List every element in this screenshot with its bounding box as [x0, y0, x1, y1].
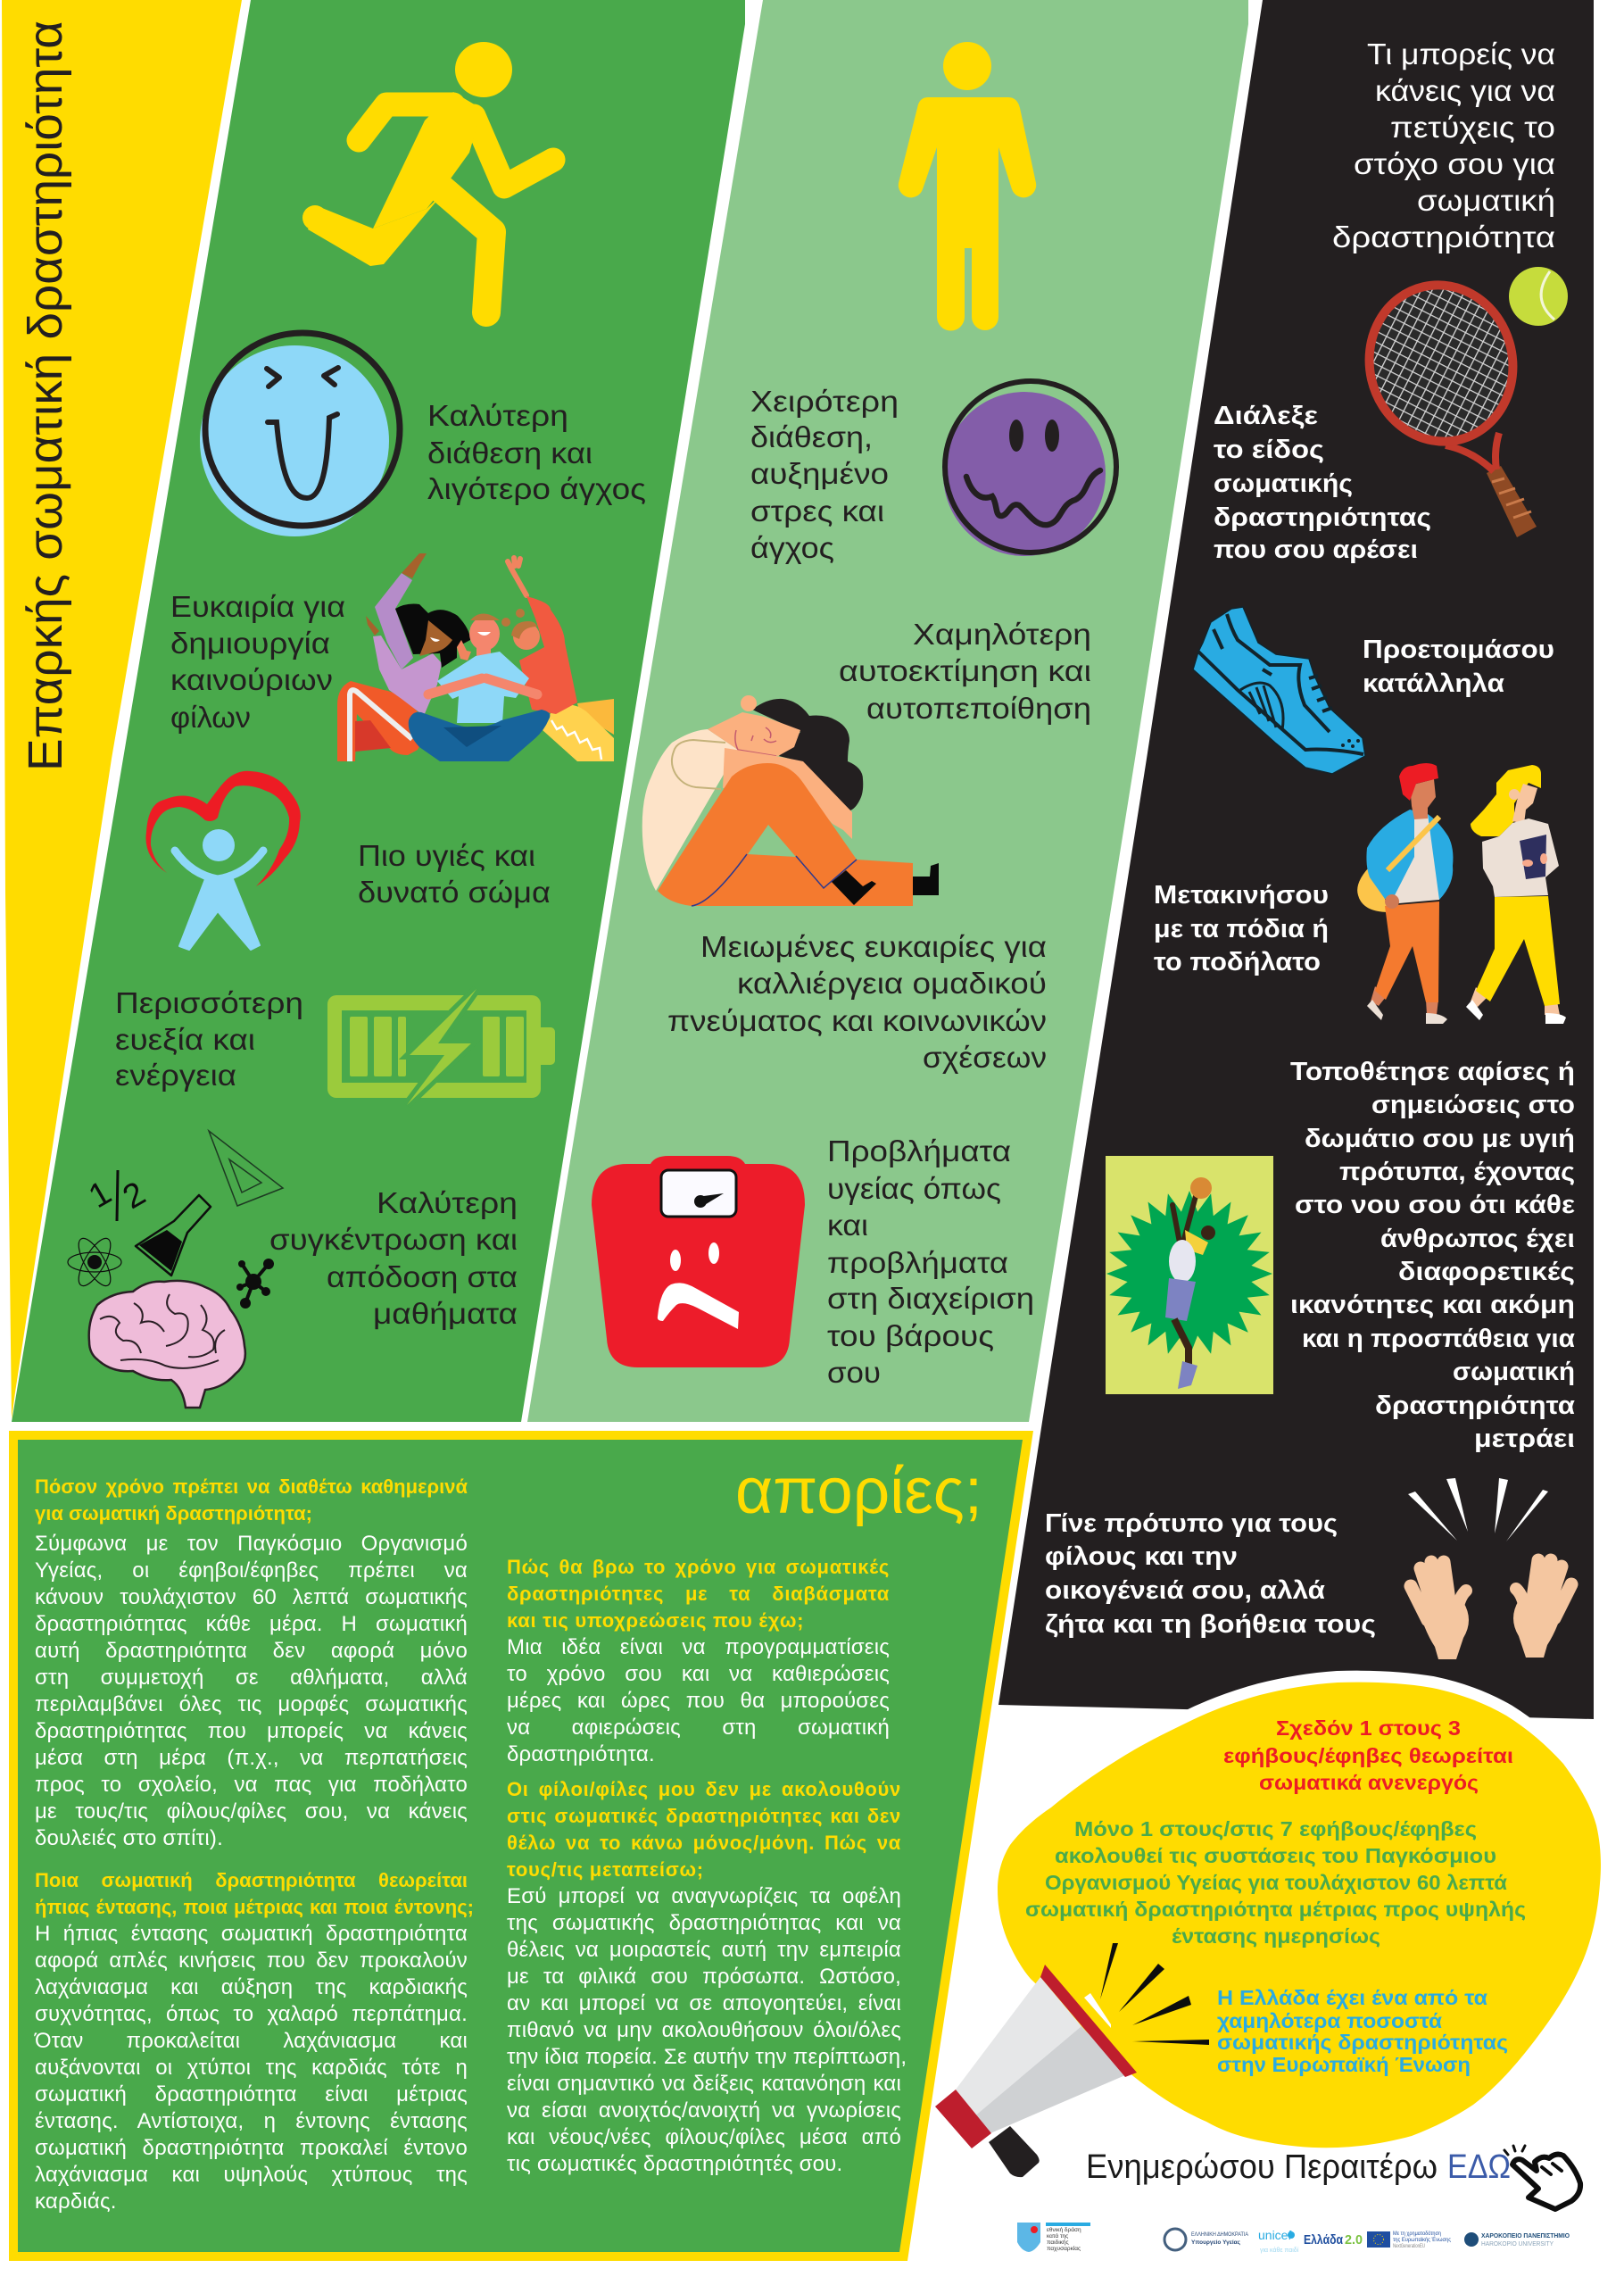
- logo: Greece 2.0: 2.0: [1345, 2232, 1363, 2248]
- text: low self esteem: αυτοεκτίμηση και: [839, 654, 1091, 687]
- icon: running figure: [302, 42, 553, 312]
- text: posters and notes: και η προσπάθεια για: [1302, 1325, 1575, 1353]
- text: posters and notes: διαφορετικές: [1398, 1258, 1575, 1286]
- text block: friends do not follow: με τα φιλικά σου πρόσωπα. Ωστόσο,: [507, 1965, 901, 1989]
- text: prepare: [1363, 636, 1554, 698]
- text: new friends: [170, 590, 345, 734]
- heading: what you can do: στόχο σου για: [1354, 147, 1555, 180]
- text: better mood: λιγότερο άγχος: [427, 472, 646, 505]
- text block: friends do not follow: θέλω να το κάνω μόνος/μόνη. Πώς να: [507, 1832, 901, 1854]
- logo: Harokopio University: HAROKOPIO UNIVERSITY: [1481, 2241, 1554, 2248]
- illustration: two students walking: [1357, 763, 1566, 1024]
- text block: friends do not follow: Εσύ μπορεί να αναγνωρίζεις τα οφέλη: [507, 1884, 901, 1908]
- text block: intensity levels: ήπιας έντασης, ποια μέτριας και ποια έντονης;: [35, 1896, 474, 1918]
- text: be a role model: φίλους και την: [1045, 1542, 1238, 1571]
- text: low self esteem: αυτοπεποίθηση: [866, 692, 1091, 725]
- text block: daily time needed: μέσα στη μέρα (π.χ., να περπατήσεις: [35, 1746, 468, 1770]
- text: be a role model: Γίνε πρότυπο για τους: [1045, 1509, 1338, 1538]
- text block: intensity levels: λαχάνιασμα και υψηλούς χτύπους της: [35, 2163, 468, 2187]
- logo: Hellenic Republic ministry: ΕΛΛΗΝΙΚΗ ΔΗΜΟΚΡΑΤΙΑ: [1191, 2231, 1249, 2238]
- text: prepare: Προετοιμάσου: [1363, 636, 1554, 664]
- text: worse mood: αυξημένο: [750, 457, 889, 490]
- logo: national action shield: εθνική δράση: [1047, 2226, 1081, 2233]
- logo: national action shield: παχυσαρκίας: [1047, 2245, 1081, 2252]
- link text: learn more here: ΕΔΩ: [1447, 2148, 1511, 2186]
- text block: daily time needed: δραστηριότητας κάθε μέρα. Η σωματική: [35, 1612, 468, 1636]
- text: be a role model: [1045, 1509, 1376, 1639]
- icon: happy face: [200, 333, 400, 536]
- text block: intensity levels: έντασης. Αντίστοιχα, η έντονης έντασης: [35, 2109, 468, 2133]
- stat: one in three inactive: σωματικά ανενεργός: [1259, 1771, 1479, 1794]
- text block: friends do not follow: [507, 1778, 907, 2176]
- text block: finding time: δραστηριότητες με τα διαβάσματα: [507, 1583, 890, 1605]
- icon: blue running shoe: [1193, 607, 1365, 774]
- heading: questions: απορίες;: [735, 1456, 982, 1527]
- text: be a role model: οικογένειά σου, αλλά: [1045, 1576, 1325, 1605]
- callout: yellow speech bubble: [998, 1683, 1601, 2148]
- text: fewer team opportunities: πνεύματος και κοινωνικών: [667, 1004, 1047, 1037]
- icon: pointing hand cursor: [1504, 2146, 1580, 2209]
- text: posters and notes: πρότυπα, έχοντας: [1339, 1158, 1575, 1186]
- text: posters and notes: [1290, 1058, 1575, 1453]
- text block: daily time needed: κάνουν τουλάχιστον 60 λεπτά σωματικής: [35, 1585, 468, 1609]
- logo: Hellenic Republic ministry: Υπουργείο Υγείας: [1191, 2239, 1241, 2246]
- text: more wellbeing: Περισσότερη: [115, 986, 303, 1019]
- illustration: sad seated girl: [642, 695, 939, 906]
- text: more wellbeing: ενέργεια: [115, 1059, 236, 1092]
- logo: unicef: unicef: [1258, 2228, 1291, 2242]
- text: new friends: δημιουργία: [170, 627, 330, 660]
- illustration: school symbols and brain: [68, 1131, 283, 1408]
- text block: friends do not follow: την ίδια πορεία. Σε αυτήν την περίπτωση,: [507, 2045, 907, 2069]
- logo: Harokopio University: [1464, 2232, 1570, 2248]
- icon: standing figure: [899, 42, 1036, 330]
- text block: friends do not follow: πιθανό να μην ακολουθήσουν όλοι/όλες: [507, 2018, 901, 2042]
- text block: friends do not follow: και νέους/νέες φίλους/φίλες μέσα από: [507, 2125, 901, 2149]
- text: worse mood: [750, 385, 899, 564]
- text: health problems: υγείας όπως: [827, 1172, 1001, 1205]
- icon: clapping hands: [1408, 1478, 1571, 1659]
- text: new friends: καινούριων: [170, 663, 333, 696]
- panel: yellow title strip: [2, 0, 242, 1419]
- text block: daily time needed: στη συμμετοχή σε αθλήματα, αλλά: [35, 1666, 468, 1690]
- text: more wellbeing: ευεξία και: [115, 1023, 255, 1056]
- text: fewer team opportunities: σχέσεων: [923, 1041, 1047, 1074]
- text: health problems: Προβλήματα: [827, 1134, 1011, 1167]
- logo: unicef: για κάθε παιδί: [1260, 2247, 1299, 2254]
- text: fewer team opportunities: [667, 930, 1047, 1074]
- vertical title: Επαρκής σωματική δραστηριότητα: [19, 21, 72, 771]
- illustration: school symbols and brain: 1: [83, 1174, 118, 1216]
- stat: one in three inactive: Σχεδόν 1 στους 3: [1276, 1716, 1461, 1740]
- text block: intensity levels: λαχάνιασμα και αύξηση της καρδιακής: [35, 1975, 468, 1999]
- text block: intensity levels: Η ήπιας έντασης σωματική δραστηριότητα: [35, 1922, 468, 1946]
- logo: national action shield: παιδικής: [1047, 2239, 1069, 2246]
- logo: unicef: [1258, 2228, 1299, 2254]
- text block: daily time needed: Σύμφωνα με τον Παγκόσμιο Οργανισμό: [35, 1532, 468, 1556]
- icon: sad red scale: [592, 1156, 805, 1367]
- stat: Greece low rates: σωματικής δραστηριότητας: [1217, 2031, 1508, 2054]
- text: more wellbeing: [115, 986, 303, 1092]
- text block: daily time needed: Υγείας, οι έφηβοι/έφηβες πρέπει να: [35, 1558, 468, 1583]
- logo: Greece 2.0: Ελλάδα: [1304, 2232, 1344, 2248]
- text: posters and notes: Τοποθέτησε αφίσες ή: [1290, 1058, 1575, 1086]
- text: worse mood: στρες και: [750, 494, 884, 528]
- text block: friends do not follow: τις σωματικές δραστηριότητές σου.: [507, 2152, 842, 2176]
- text: walk or cycle: [1154, 881, 1329, 976]
- text block: intensity levels: [34, 1869, 474, 2214]
- stat: Greece low rates: στην Ευρωπαϊκή Ένωση: [1217, 2053, 1471, 2076]
- text: healthier body: δυνατό σώμα: [358, 876, 551, 909]
- stat: Greece low rates: χαμηλότερα ποσοστά: [1217, 2009, 1442, 2032]
- logo: EU funding: Με τη χρηματοδότηση: [1393, 2231, 1441, 2237]
- text block: friends do not follow: να είσαι ανοιχτός/ανοιχτή να γνωρίσεις: [507, 2098, 901, 2123]
- icon: wobbly purple face: [943, 381, 1116, 556]
- text block: intensity levels: συχνότητας, όπως το χαλαρό περπάτημα.: [35, 2002, 468, 2026]
- text block: daily time needed: δραστηριότητας που μπορείς να κάνεις: [35, 1719, 468, 1743]
- text: worse mood: διάθεση,: [750, 420, 873, 453]
- text: health problems: σου: [827, 1356, 881, 1389]
- stat: one in seven follows recommendations: σωματική δραστηριότητα μέτριας προς υψηλής: [1025, 1898, 1526, 1921]
- text: fewer team opportunities: Μειωμένες ευκαιρίες για: [700, 930, 1047, 963]
- text block: daily time needed: αυτή δραστηριότητα δεν αφορά μόνο: [35, 1639, 468, 1663]
- text block: intensity levels: αφορά απλές κινήσεις που δεν προκαλούν: [35, 1948, 468, 1973]
- text: worse mood: άγχος: [750, 531, 834, 564]
- panel: consequences light green: [527, 0, 1248, 1422]
- text block: finding time: δραστηριότητα.: [507, 1742, 655, 1766]
- text block: friends do not follow: Οι φίλοι/φίλες μου δεν με ακολουθούν: [507, 1778, 901, 1800]
- text: choose the activity: το είδος: [1214, 436, 1324, 464]
- text block: finding time: να αφιερώσεις στη σωματική: [507, 1716, 890, 1740]
- text: choose the activity: [1214, 402, 1431, 564]
- text: better mood: [427, 399, 646, 505]
- illustration: school symbols and brain: 2: [117, 1175, 152, 1217]
- text: better concentration: συγκέντρωση και: [269, 1223, 518, 1256]
- panel: what you can do black: [998, 0, 1594, 1719]
- text: posters and notes: άνθρωπος έχει: [1380, 1225, 1575, 1253]
- text block: daily time needed: για σωματική δραστηριότητα;: [35, 1502, 312, 1525]
- logo: Hellenic Republic ministry: [1164, 2229, 1249, 2250]
- illustration: group of friends: [337, 553, 614, 761]
- text: posters and notes: δραστηριότητα: [1375, 1392, 1575, 1420]
- text block: finding time: και τις υποχρεώσεις που έχω;: [507, 1609, 804, 1632]
- text block: finding time: το χρόνο σου και να καθιερώσεις: [507, 1662, 890, 1686]
- logo: national action shield: κατά της: [1047, 2232, 1068, 2239]
- text block: friends do not follow: αν και μπορεί να σε απογοητεύει, είναι: [507, 1991, 901, 2015]
- heading: what you can do: σωματική: [1417, 184, 1555, 217]
- text block: intensity levels: σωματική δραστηριότητα προκαλεί έντονο: [35, 2136, 468, 2160]
- text: walk or cycle: Μετακινήσου: [1154, 881, 1329, 910]
- stat: one in three inactive: [1223, 1716, 1513, 1794]
- text: prepare: κατάλληλα: [1363, 669, 1504, 698]
- text: better concentration: μαθήματα: [373, 1297, 518, 1330]
- icon: charging battery: [327, 989, 555, 1105]
- text: worse mood: Χειρότερη: [750, 385, 899, 418]
- text block: finding time: [507, 1556, 890, 1766]
- stat: one in seven follows recommendations: Μόνο 1 στους/στις 7 εφήβους/έφηβες: [1074, 1817, 1477, 1840]
- text: better concentration: Καλύτερη: [377, 1186, 518, 1219]
- text block: friends do not follow: τους/τις μεταπείσω;: [507, 1858, 704, 1881]
- text: better concentration: [269, 1186, 518, 1330]
- text block: daily time needed: προς το σχολείο, να πας για ποδήλατο: [35, 1773, 468, 1797]
- text block: intensity levels: αυξάνονται οι χτύποι της καρδιάς τότε η: [35, 2056, 468, 2080]
- text: better mood: Καλύτερη: [427, 399, 568, 432]
- text block: daily time needed: Πόσον χρόνο πρέπει να διαθέτω καθημερινά: [35, 1475, 468, 1498]
- text block: intensity levels: Όταν προκαλείται λαχάνιασμα και: [35, 2029, 468, 2053]
- text: posters and notes: σημειώσεις στο: [1371, 1091, 1575, 1119]
- text block: finding time: Μια ιδέα είναι να προγραμματίσεις: [507, 1635, 890, 1659]
- illustration: basketball poster: [1106, 1156, 1273, 1394]
- logo: EU funding: NextGenerationEU: [1393, 2244, 1425, 2249]
- panel: questions frame: [9, 1431, 1033, 2261]
- text block: finding time: Πώς θα βρω το χρόνο για σωματικές: [507, 1556, 890, 1578]
- logo: Harokopio University: ΧΑΡΟΚΟΠΕΙΟ ΠΑΝΕΠΙΣΤΗΜΙΟ: [1481, 2233, 1570, 2239]
- text: choose the activity: που σου αρέσει: [1214, 536, 1418, 564]
- text block: daily time needed: [35, 1475, 468, 1850]
- text block: daily time needed: δουλειές στο σπίτι).: [35, 1826, 223, 1850]
- text: better mood: διάθεση και: [427, 436, 592, 469]
- text: choose the activity: δραστηριότητας: [1214, 503, 1431, 532]
- text: posters and notes: στο νου σου ότι κάθε: [1295, 1191, 1575, 1219]
- text: posters and notes: σωματική: [1453, 1358, 1575, 1386]
- text: be a role model: ζήτα και τη βοήθεια τους: [1045, 1610, 1376, 1639]
- text block: daily time needed: περιλαμβάνει όλες τις μορφές σωματικής: [35, 1692, 468, 1716]
- text: health problems: και: [827, 1209, 868, 1242]
- heading: what you can do: δραστηριότητα: [1332, 220, 1555, 253]
- stat: Greece low rates: Η Ελλάδα έχει ένα από τα: [1217, 1986, 1487, 2009]
- text: health problems: [827, 1134, 1034, 1389]
- heading: what you can do: πετύχεις το: [1390, 111, 1555, 144]
- text: fewer team opportunities: καλλιέργεια ομαδικού: [737, 967, 1047, 1000]
- text: low self esteem: Χαμηλότερη: [913, 618, 1091, 651]
- text: healthier body: Πιο υγιές και: [358, 839, 535, 872]
- text block: friends do not follow: είναι σημαντικό να δείξεις κατανόηση και: [507, 2072, 901, 2096]
- text block: daily time needed: με τους/τις φίλους/φίλες σου, να κάνεις: [35, 1799, 468, 1824]
- text block: finding time: μέρες και ώρες που θα μπορούσες: [507, 1689, 890, 1713]
- stat: one in seven follows recommendations: έντασης ημερησίως: [1172, 1924, 1380, 1948]
- text: new friends: Ευκαιρία για: [170, 590, 345, 623]
- text block: intensity levels: σωματική δραστηριότητα είναι μέτριας: [35, 2082, 468, 2106]
- text block: friends do not follow: στις σωματικές δραστηριότητες και δεν: [507, 1805, 901, 1827]
- text: choose the activity: Διάλεξε: [1214, 402, 1318, 430]
- text: choose the activity: σωματικής: [1214, 469, 1353, 498]
- text block: intensity levels: καρδιάς.: [35, 2189, 117, 2214]
- text block: intensity levels: Ποια σωματική δραστηριότητα θεωρείται: [35, 1869, 468, 1891]
- text: posters and notes: μετράει: [1474, 1425, 1575, 1453]
- logo: EU funding: της Ευρωπαϊκής Ένωσης: [1393, 2237, 1451, 2243]
- text: low self esteem: [839, 618, 1091, 725]
- text: posters and notes: δωμάτιο σου με υγιή: [1305, 1125, 1575, 1153]
- icon: heart with healthy figure: [145, 771, 301, 950]
- text: health problems: στη διαχείριση: [827, 1282, 1034, 1315]
- text: walk or cycle: το ποδήλατο: [1154, 948, 1321, 976]
- stat: one in seven follows recommendations: Οργανισμού Υγείας για τουλάχιστον 60 λεπτά: [1045, 1871, 1507, 1894]
- text block: friends do not follow: της σωματικής δραστηριότητας και να: [507, 1911, 901, 1935]
- panel: benefits green: [12, 0, 745, 1422]
- heading: what you can do: [1332, 37, 1555, 253]
- logo: EU funding: [1367, 2231, 1451, 2249]
- text: healthier body: [358, 839, 551, 909]
- text: health problems: του βάρους: [827, 1319, 994, 1352]
- heading: what you can do: κάνεις για να: [1375, 74, 1555, 107]
- stat: one in three inactive: εφήβους/έφηβες θεωρείται: [1223, 1744, 1513, 1767]
- text: new friends: φίλων: [170, 701, 251, 734]
- text: posters and notes: ικανότητες και ακόμη: [1290, 1291, 1575, 1319]
- logo: national action shield: [1017, 2223, 1090, 2252]
- text block: friends do not follow: θέλεις να μοιραστείς αυτή την εμπειρία: [507, 1938, 901, 1962]
- text: better concentration: απόδοση στα: [327, 1260, 518, 1293]
- icon: megaphone: [935, 1943, 1209, 2177]
- stat: Greece low rates: [1217, 1986, 1508, 2076]
- stat: one in seven follows recommendations: ακολουθεί τις συστάσεις του Παγκόσμιου: [1055, 1844, 1496, 1867]
- heading: what you can do: Τι μπορείς να: [1367, 37, 1555, 71]
- text: health problems: προβλήματα: [827, 1246, 1008, 1279]
- stat: one in seven follows recommendations: [1025, 1817, 1526, 1948]
- link text: learn more here: Ενημερώσου Περαιτέρω: [1086, 2148, 1438, 2186]
- text: walk or cycle: με τα πόδια ή: [1154, 915, 1329, 943]
